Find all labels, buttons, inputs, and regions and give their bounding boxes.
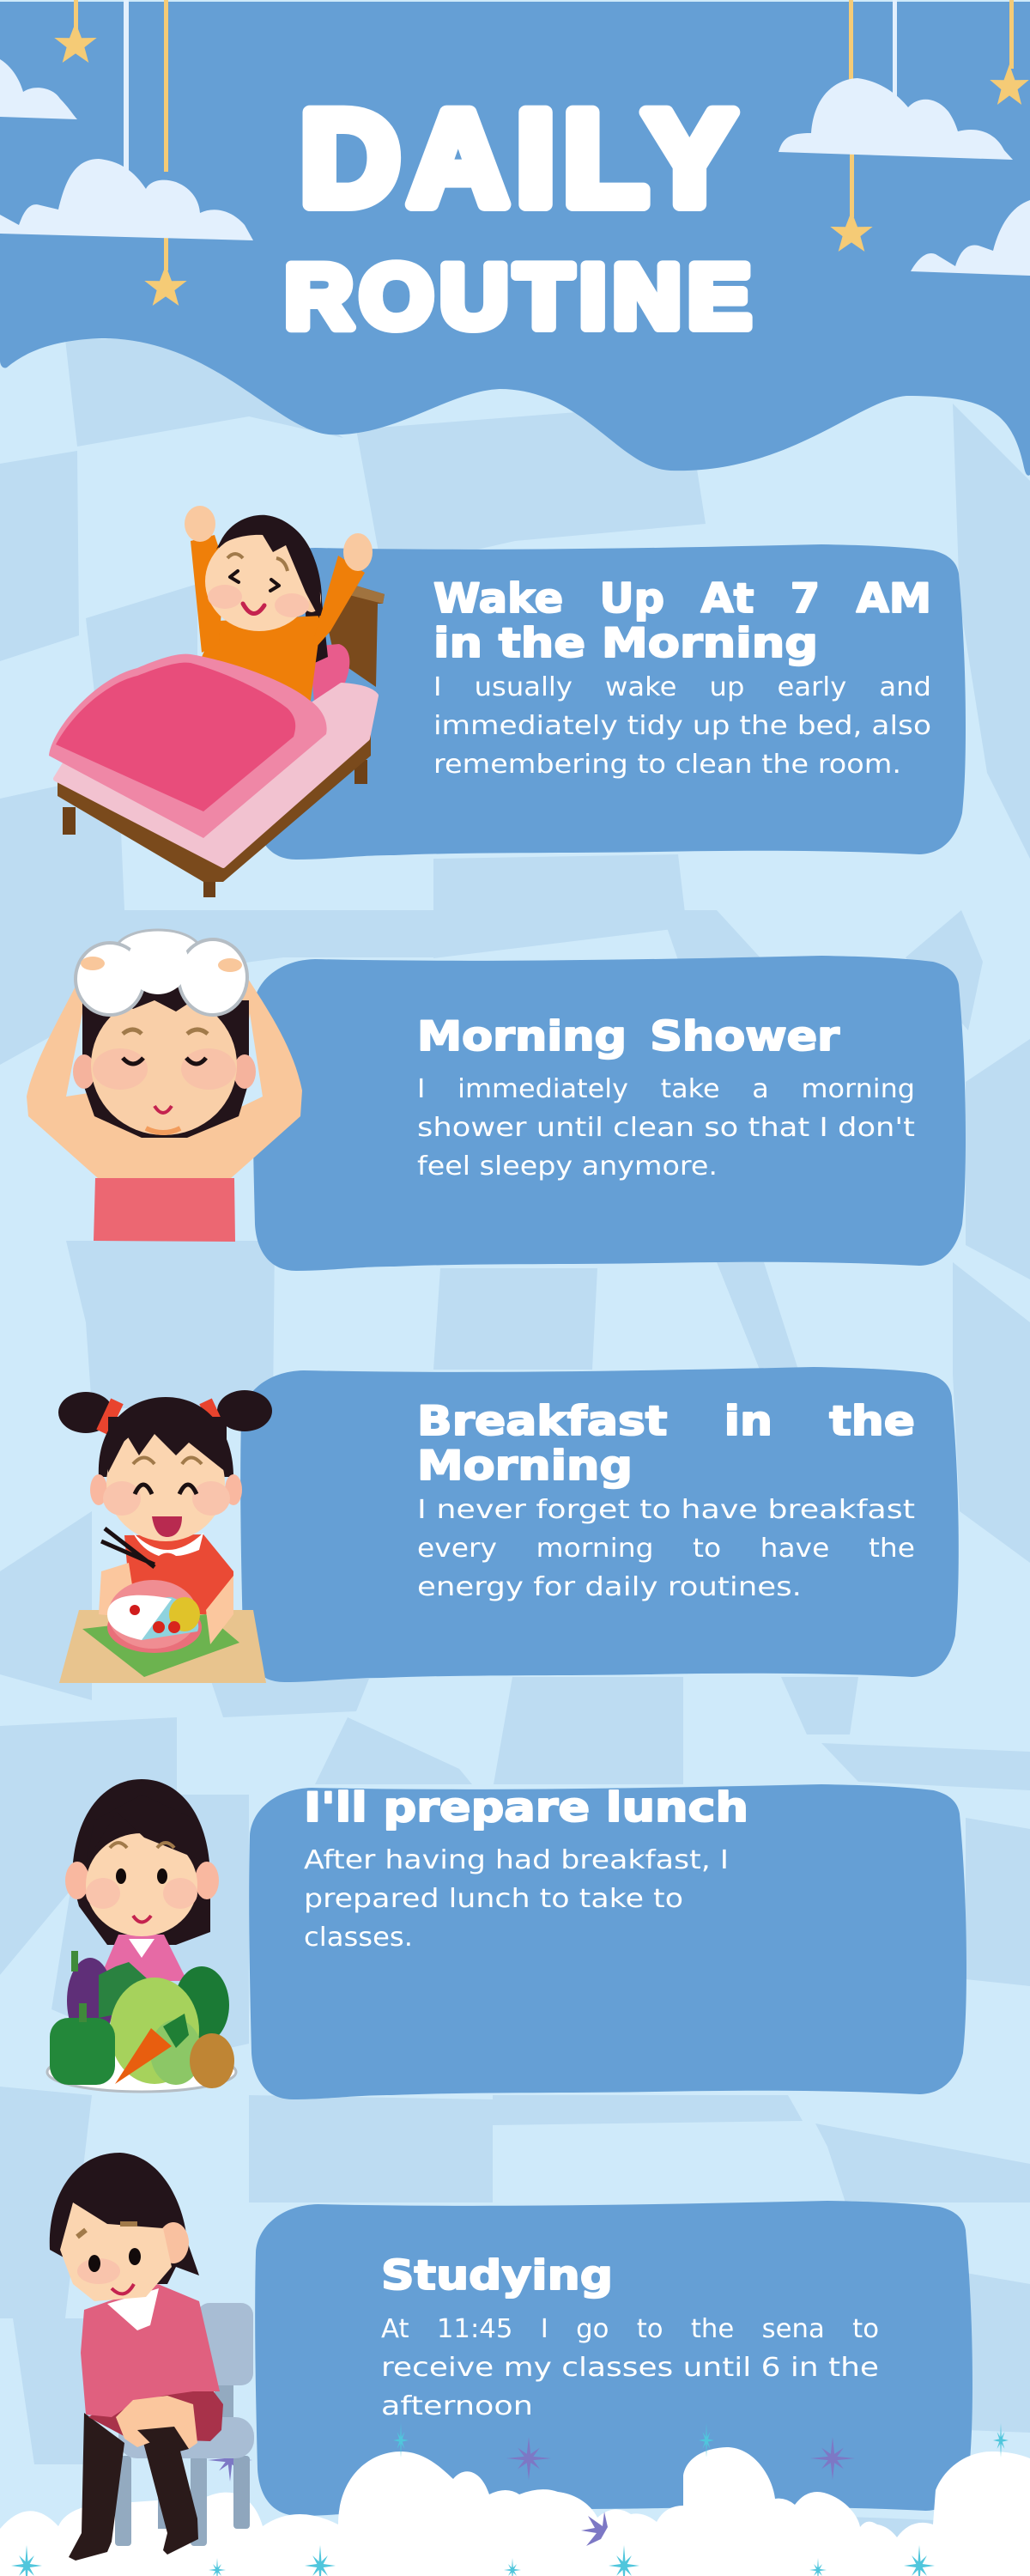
text: wake up body: immediately tidy up the bed, also — [433, 711, 931, 741]
heading: breakfast: Morning — [417, 1443, 633, 1490]
heading: wake up — [433, 575, 931, 667]
heading: morning shower: Morning Shower — [417, 1013, 840, 1060]
panel: wake up — [252, 544, 966, 860]
heading: prepare lunch: I'll prepare lunch — [304, 1784, 748, 1832]
heading: breakfast: Breakfast in the — [417, 1398, 915, 1445]
heading: wake up: in the Morning — [433, 620, 818, 667]
illustration: girl sitting on chair — [50, 2153, 254, 2561]
text: breakfast body: every morning to have the — [417, 1534, 915, 1564]
heading: studying: Studying — [381, 2252, 613, 2300]
illustration: girl waking up in bed — [49, 506, 385, 897]
icon: hanging clouds and stars — [0, 0, 1030, 306]
panel: morning shower — [252, 956, 966, 1271]
text: studying body: receive my classes until 6 in the — [381, 2353, 879, 2383]
title: ROUTINE — [285, 247, 758, 347]
title — [285, 84, 758, 347]
header banner — [0, 2, 1030, 476]
text: breakfast body: I never forget to have breakfast — [417, 1495, 915, 1525]
panel: prepare lunch — [249, 1784, 966, 2099]
text: morning shower body — [417, 1074, 915, 1182]
text: wake up body — [433, 672, 931, 780]
text: prepare lunch body: prepared lunch to take to — [304, 1884, 683, 1914]
text: prepare lunch body: classes. — [304, 1923, 413, 1953]
panel: breakfast — [240, 1367, 959, 1682]
heading: wake up: Wake Up At 7 AM — [433, 575, 931, 623]
title: DAILY — [300, 84, 744, 234]
text: breakfast body — [417, 1495, 915, 1602]
text: morning shower body: feel sleepy anymore. — [417, 1151, 718, 1182]
text: wake up body: I usually wake up early and — [433, 672, 931, 702]
footer: clouds and sparkles — [0, 2423, 1030, 2576]
illustration: girl eating breakfast — [58, 1390, 272, 1683]
illustration: girl washing hair — [27, 930, 302, 1242]
text: breakfast body: energy for daily routines. — [417, 1572, 802, 1602]
text: morning shower body: I immediately take a morning — [417, 1074, 915, 1104]
heading: breakfast — [417, 1398, 915, 1490]
illustration: girl with vegetables — [47, 1779, 236, 2092]
text: morning shower body: shower until clean so that I don't — [417, 1113, 915, 1143]
text: prepare lunch body — [304, 1845, 729, 1953]
text: wake up body: remembering to clean the room. — [433, 750, 901, 780]
text: prepare lunch body: After having had breakfast, I — [304, 1845, 729, 1875]
text: studying body: At 11:45 I go to the sena to — [381, 2314, 879, 2344]
text: studying body — [381, 2314, 879, 2421]
panel: studying — [255, 2201, 972, 2516]
text: studying body: afternoon — [381, 2391, 533, 2421]
